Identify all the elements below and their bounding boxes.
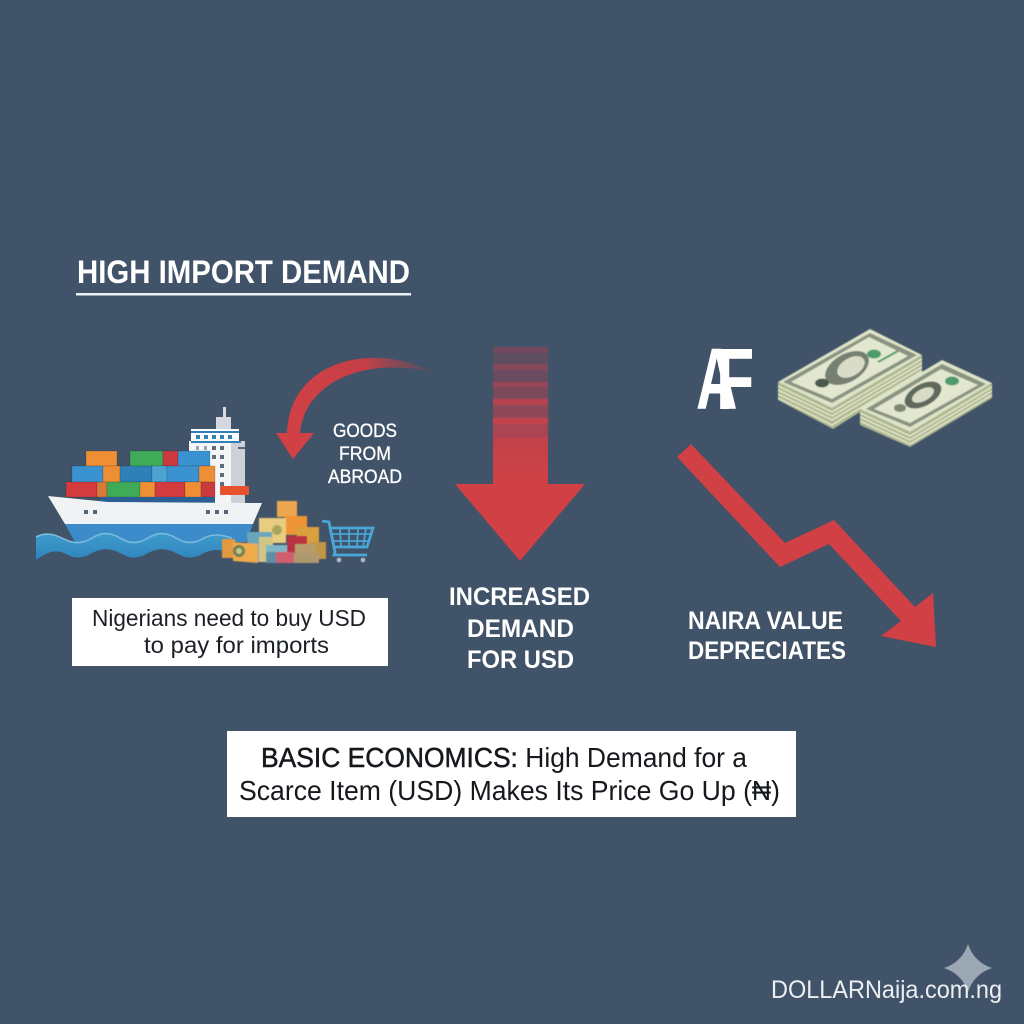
label: goods from abroad: ABROAD: [328, 467, 402, 488]
icon: stacks of US dollars: [778, 329, 992, 447]
watermark: DOLLARNaija.com.ng: [771, 976, 1002, 1004]
callout: basic economics: [227, 731, 796, 817]
icon: cargo ship: [36, 407, 262, 560]
dark deck: [100, 497, 215, 503]
waves: [36, 534, 232, 560]
title: High Import Demand: HIGH IMPORT DEMAND: [77, 254, 410, 290]
label: increased demand for USD: FOR USD: [467, 646, 574, 674]
label: naira value depreciates: [688, 607, 846, 665]
label: increased demand for USD: INCREASED: [449, 583, 590, 611]
icon: shopping cart: [322, 521, 373, 562]
white hull: [48, 496, 262, 524]
zigzag depreciation arrow: [677, 444, 936, 647]
icon: garbled naira symbol: A: [696, 330, 737, 428]
label: naira value depreciates: DEPRECIATES: [688, 637, 846, 665]
label: increased demand for USD: [449, 583, 590, 674]
callout: need to buy USD: Nigerians need to buy USD: [92, 605, 366, 631]
label: naira value depreciates: NAIRA VALUE: [688, 607, 843, 635]
curved arrow: [276, 358, 433, 459]
icon: pile of goods: [222, 501, 326, 563]
back stack: [778, 329, 922, 429]
callout: need to buy USD: to pay for imports: [144, 632, 329, 658]
portholes: [84, 510, 228, 514]
label: goods from abroad: [328, 421, 402, 488]
callout: basic economics: Scarce Item (USD) Makes Its Price Go Up (₦): [239, 775, 780, 806]
icon: sparkle: [944, 944, 992, 992]
label: increased demand for USD: DEMAND: [467, 615, 574, 643]
label: goods from abroad: FROM: [339, 444, 391, 465]
label: goods from abroad: GOODS: [333, 421, 397, 442]
callout: basic economics: BASIC ECONOMICS: High Demand for a: [261, 742, 748, 773]
icon: garbled naira symbol: F: [716, 331, 754, 429]
callout: need to buy USD: [72, 598, 388, 666]
big down arrow: [455, 347, 585, 561]
containers: [66, 451, 215, 497]
front stack: [860, 360, 992, 447]
ship tower: [189, 407, 245, 504]
lifeboat: [220, 486, 249, 495]
blue hull: [65, 524, 253, 542]
